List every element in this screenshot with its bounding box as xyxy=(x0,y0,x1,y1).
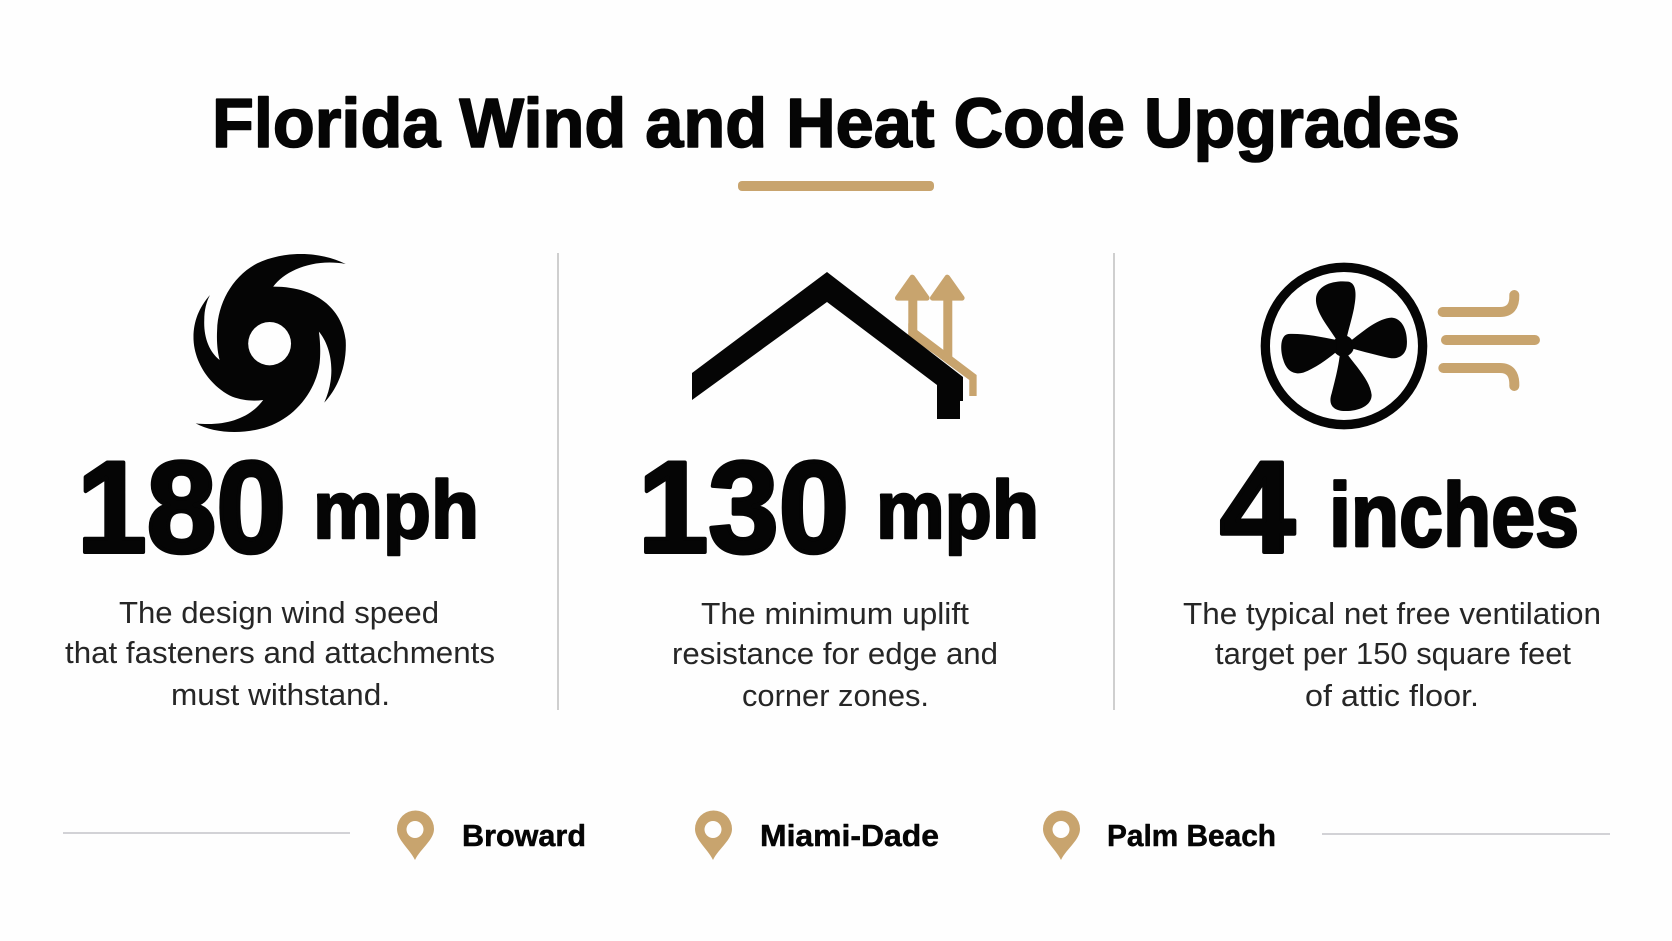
value: 130 mph: 130 xyxy=(638,434,849,580)
description: attic ventilation xyxy=(1183,596,1601,713)
icon: ventilation fan xyxy=(1265,267,1535,425)
value: 180 mph: 180 xyxy=(77,434,286,580)
panel: uplift resistance xyxy=(638,272,1039,713)
description: attic ventilation: of attic floor. xyxy=(1305,678,1479,713)
county: Miami-Dade: Miami-Dade xyxy=(760,818,939,853)
value: 130 mph xyxy=(638,434,1039,580)
value: 4 inches: 4 xyxy=(1220,434,1295,580)
description: attic ventilation: The typical net free ventilation xyxy=(1183,596,1601,631)
description: design wind speed: that fasteners and attachments xyxy=(65,635,495,670)
value: 4 inches xyxy=(1220,434,1579,580)
description: attic ventilation: target per 150 square feet xyxy=(1215,636,1571,671)
value: 180 mph: mph xyxy=(313,465,479,556)
panel: design wind speed xyxy=(65,254,495,712)
description: uplift resistance: The minimum uplift xyxy=(701,596,969,631)
county: Palm Beach xyxy=(1043,810,1276,860)
value: 180 mph xyxy=(77,434,479,580)
value: 130 mph: mph xyxy=(876,465,1039,556)
description: uplift resistance: corner zones. xyxy=(742,678,929,713)
county: Broward xyxy=(397,810,586,860)
icon: location pin xyxy=(397,810,434,860)
county: Broward: Broward xyxy=(462,818,586,853)
title underline xyxy=(738,181,934,191)
county: Miami-Dade xyxy=(695,810,939,860)
icon: location pin xyxy=(1043,810,1080,860)
value: 4 inches: inches xyxy=(1329,466,1579,566)
description: design wind speed xyxy=(65,595,495,712)
icon: location pin xyxy=(695,810,732,860)
description: design wind speed: must withstand. xyxy=(171,677,390,712)
description: design wind speed: The design wind speed xyxy=(119,595,439,630)
county: Palm Beach: Palm Beach xyxy=(1107,818,1276,853)
description: uplift resistance xyxy=(672,596,998,713)
panel: attic ventilation xyxy=(1183,267,1601,713)
icon: hurricane xyxy=(193,254,346,432)
title: Florida Wind and Heat Code Upgrades xyxy=(212,84,1460,162)
icon: roof with uplift arrows xyxy=(692,272,977,419)
description: uplift resistance: resistance for edge and xyxy=(672,636,998,671)
